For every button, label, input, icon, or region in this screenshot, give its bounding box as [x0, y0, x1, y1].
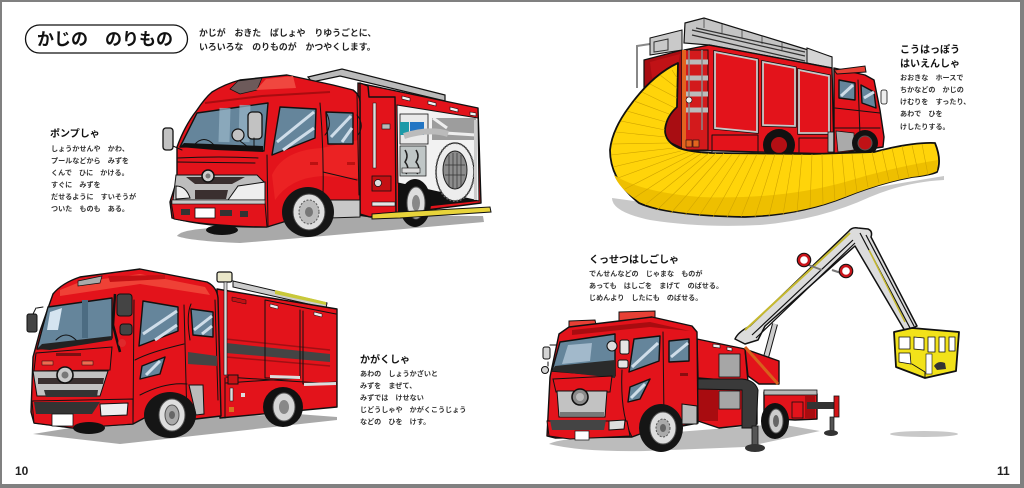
exhaust truck cab — [834, 66, 887, 156]
pump truck grille — [173, 175, 265, 200]
chemical truck wheels — [73, 387, 303, 438]
horizontal dark pipe — [698, 379, 758, 428]
pump truck open door — [360, 83, 396, 217]
ladder truck windshield — [552, 334, 615, 376]
front outrigger — [745, 426, 765, 452]
pump truck side windows — [272, 107, 316, 155]
text block: articulated ladder truck: じめんより したにも のばせる。 — [589, 293, 702, 302]
chemical truck cab — [27, 269, 221, 428]
chemical truck mirrors — [27, 314, 37, 332]
ladder truck side windows — [629, 336, 660, 372]
boom strut — [762, 324, 775, 372]
chemical truck rack and light — [217, 272, 327, 308]
ladder truck bumper — [547, 421, 630, 439]
pump truck front wheels — [206, 187, 334, 237]
pump truck mirrors — [163, 128, 173, 150]
illustration: chemical truck — [27, 269, 337, 444]
text block: smoke exhaust truck: けむりを すったり、 — [900, 97, 970, 106]
red rings — [798, 254, 852, 276]
chemical truck windshield — [37, 298, 112, 349]
text block: pump truck: プールなどから みずを — [51, 156, 129, 165]
text block: pump truck: くんで ひに かける。 — [51, 169, 129, 177]
ladder truck cab — [542, 311, 698, 440]
text block: chemical truck: などの ひを けす。 — [360, 417, 430, 426]
ladder truck front panel and grille — [553, 376, 612, 392]
text block: articulated ladder truck — [589, 253, 723, 302]
ladder truck front wheel — [639, 404, 683, 452]
chemical truck side windows — [139, 301, 178, 346]
text block: chemical truck: みずでは けせない — [360, 393, 424, 402]
pump truck bumper — [171, 201, 267, 227]
exhaust truck rear section — [637, 30, 682, 148]
text block: smoke exhaust truck: けしたりする。 — [900, 122, 950, 131]
illustration: smoke exhaust truck — [610, 18, 944, 226]
text block: smoke exhaust truck: ちかなどの かじの — [900, 85, 964, 94]
yellow exhaust hose — [610, 63, 939, 217]
text block: smoke exhaust truck — [900, 43, 970, 131]
pump truck cab — [163, 75, 361, 227]
text block: smoke exhaust truck: あわで ひを — [900, 110, 943, 118]
hose ribs — [611, 70, 928, 217]
ladder basket — [894, 328, 959, 378]
page number right: 11 — [997, 464, 1010, 478]
pump truck yellow step — [372, 207, 491, 219]
pump truck ladder rack — [308, 69, 445, 101]
text block: smoke exhaust truck: おおきな ホースで — [900, 73, 964, 82]
ladder truck mirrors — [543, 347, 550, 359]
pump truck rear body — [358, 83, 481, 217]
text block: smoke exhaust truck: はいえんしゃ — [900, 58, 960, 70]
chemical truck side step — [189, 385, 204, 415]
text block: chemical truck — [360, 353, 466, 426]
ladder truck shadow — [549, 424, 820, 451]
ladder boom — [735, 228, 917, 372]
exhaust truck roof rack — [684, 18, 832, 68]
ladder truck door lines — [622, 332, 664, 437]
ladder truck rear wheel — [761, 403, 789, 439]
chemical truck shadow — [33, 414, 337, 444]
basket shadow — [890, 431, 958, 437]
pump truck side step — [325, 200, 360, 218]
pump truck rear wheel — [399, 179, 431, 227]
exhaust truck shadow — [612, 176, 944, 226]
intro text: いろいろな のりものが かつやくします。 — [199, 41, 376, 52]
pump truck door lines — [267, 95, 359, 227]
pump truck windshield — [180, 103, 268, 151]
exhaust truck rear wheel — [763, 129, 795, 161]
text block: pump truck: すぐに みずを — [51, 180, 101, 189]
text block: pump truck: ポンプしゃ — [50, 128, 100, 140]
text block: articulated ladder truck: でんせんなどの じゃまな ものが — [589, 269, 702, 278]
chemical truck bumper — [32, 399, 133, 428]
chemical truck rear body — [217, 282, 337, 418]
intro text — [199, 27, 376, 52]
text block: pump truck: だせるように すいそうが — [51, 192, 136, 201]
page number left: 10 — [15, 464, 29, 478]
intro text: かじが おきた ばしょや りゆうごとに、 — [199, 27, 376, 38]
text block: chemical truck: あわの しょうかざいと — [360, 369, 438, 378]
rear outrigger — [807, 396, 839, 436]
ladder truck side step — [682, 404, 697, 424]
chemical truck door lines and stripe — [133, 300, 218, 424]
text block: articulated ladder truck: くっせつはしごしゃ — [589, 253, 679, 266]
text block: chemical truck: みずを まぜて、 — [360, 381, 416, 390]
text block: chemical truck: かがくしゃ — [360, 353, 410, 366]
title pill: かじの のりもの — [37, 30, 173, 49]
illustration: pump truck — [163, 69, 491, 243]
text block: pump truck: しょうかせんや かわ、 — [51, 144, 129, 153]
ladder truck rear section — [697, 339, 817, 428]
pump truck headlights — [176, 186, 190, 199]
text block: articulated ladder truck: あっても はしごを まげて のばせる。 — [589, 281, 723, 290]
exhaust truck body — [682, 45, 840, 154]
text block: pump truck — [50, 128, 136, 213]
text block: smoke exhaust truck: こうはっぽう — [900, 43, 960, 56]
illustration: articulated ladder truck — [542, 228, 959, 452]
chemical truck front panel — [34, 347, 112, 371]
title pill — [26, 25, 188, 53]
chemical truck grille — [33, 371, 108, 396]
pump truck shadow — [177, 215, 484, 243]
text block: pump truck: ついた ものも ある。 — [51, 205, 129, 213]
pump truck front panel lines — [177, 157, 258, 163]
text block: chemical truck: じどうしゃや かがくこうじょう — [360, 405, 466, 414]
